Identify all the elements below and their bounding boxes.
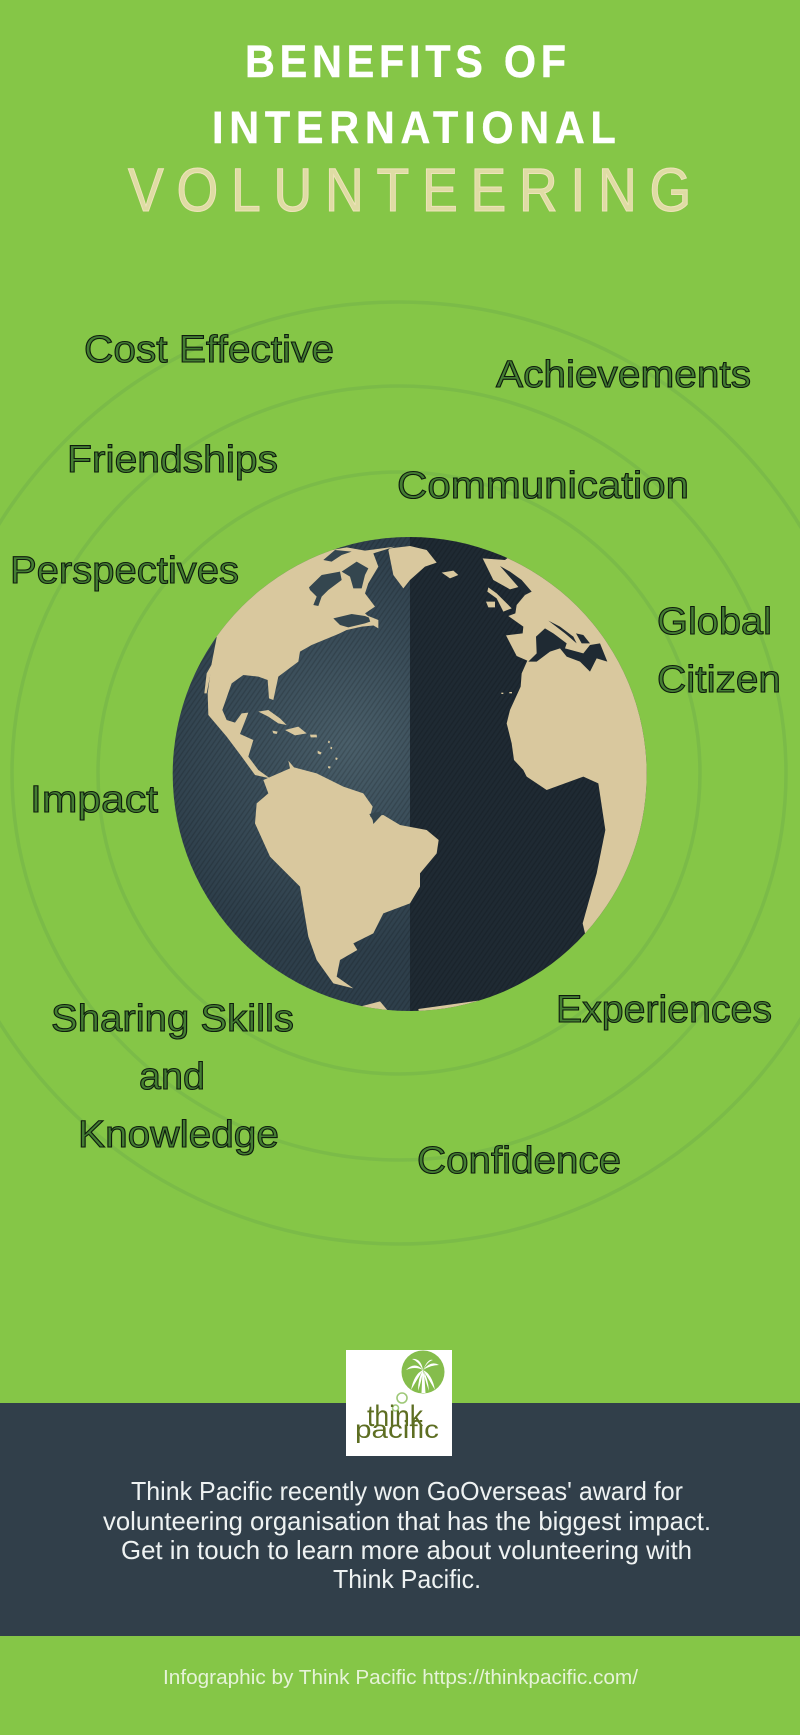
logo word: think: think [367,1400,424,1433]
Antarctica left [362,1001,388,1010]
Gulf of St Lawrence [333,614,375,627]
Puerto Rico [310,735,317,737]
Antilles dots [318,741,338,769]
Old World land [388,546,647,934]
Antarctica right [418,1000,478,1011]
ocean: lit half [172,537,410,1011]
Baja sliver [204,665,212,694]
label: communication: Communication [397,465,689,507]
Jamaica [272,731,278,734]
logo background [346,1350,452,1456]
Americas land, south, and Antarctica [255,761,478,1017]
label: confidence: Confidence [417,1140,621,1182]
Cuba [258,710,287,725]
label: sharing skills: Sharing Skills [51,998,294,1040]
ocean: shadow half [410,537,647,1011]
South America [255,761,439,988]
logo bubbles [392,1393,407,1411]
label: friendships: Friendships [67,439,278,481]
Hispaniola [285,727,307,735]
title [128,37,691,225]
concentric rings [0,302,800,1244]
label: and: and [139,1056,205,1098]
Hudson Bay [309,572,342,606]
award text [103,1476,711,1594]
logo palm badge [402,1350,444,1394]
Ireland [486,602,495,607]
label: achievements: Achievements [496,354,751,396]
Greenland [388,546,437,588]
award text line 3: Get in touch to learn more about volunteering with [121,1535,692,1565]
Great Britain [487,587,512,612]
footer credit: Infographic by Think Pacific https://thinkpacific.com/ [163,1667,638,1689]
Americas land, north [198,540,395,778]
globe [172,537,647,1011]
logo wordmark [355,1400,439,1444]
label: global: Global [657,601,772,643]
Adriatic arm [576,633,590,643]
North America [198,540,395,778]
label: cost effective: Cost Effective [84,329,334,371]
award text line 2: volunteering organisation that has the biggest impact. [103,1506,711,1536]
title line: benefits of: BENEFITS OF [245,37,566,87]
label: citizen: Citizen [657,659,781,701]
ocean halves [172,537,647,1011]
Black Sea arm [548,621,577,643]
award text line 1: Think Pacific recently won GoOverseas' award for [131,1476,683,1506]
Iceland [442,571,458,578]
label: experiences: Experiences [556,989,772,1031]
Amazon mouth [369,812,382,824]
award text line 4: Think Pacific. [333,1564,481,1594]
Baltic [500,566,532,595]
logo: think pacific [346,1350,452,1456]
label: impact: Impact [30,779,158,821]
Mediterranean [528,628,607,672]
title line: international: INTERNATIONAL [212,103,616,153]
ocean texture [172,537,553,1011]
benefit labels [10,329,781,1182]
Canary dots [501,692,512,694]
dark footer band [0,1403,800,1636]
Newfoundland [368,616,378,628]
logo word: pacific: pacific [355,1416,439,1444]
title line: volunteering: VOLUNTEERING [128,157,691,225]
Foxe Basin [342,562,368,588]
Europe and Africa [482,558,647,934]
label: perspectives: Perspectives [10,550,239,592]
Arctic channel [323,550,352,562]
label: knowledge: Knowledge [78,1114,279,1156]
